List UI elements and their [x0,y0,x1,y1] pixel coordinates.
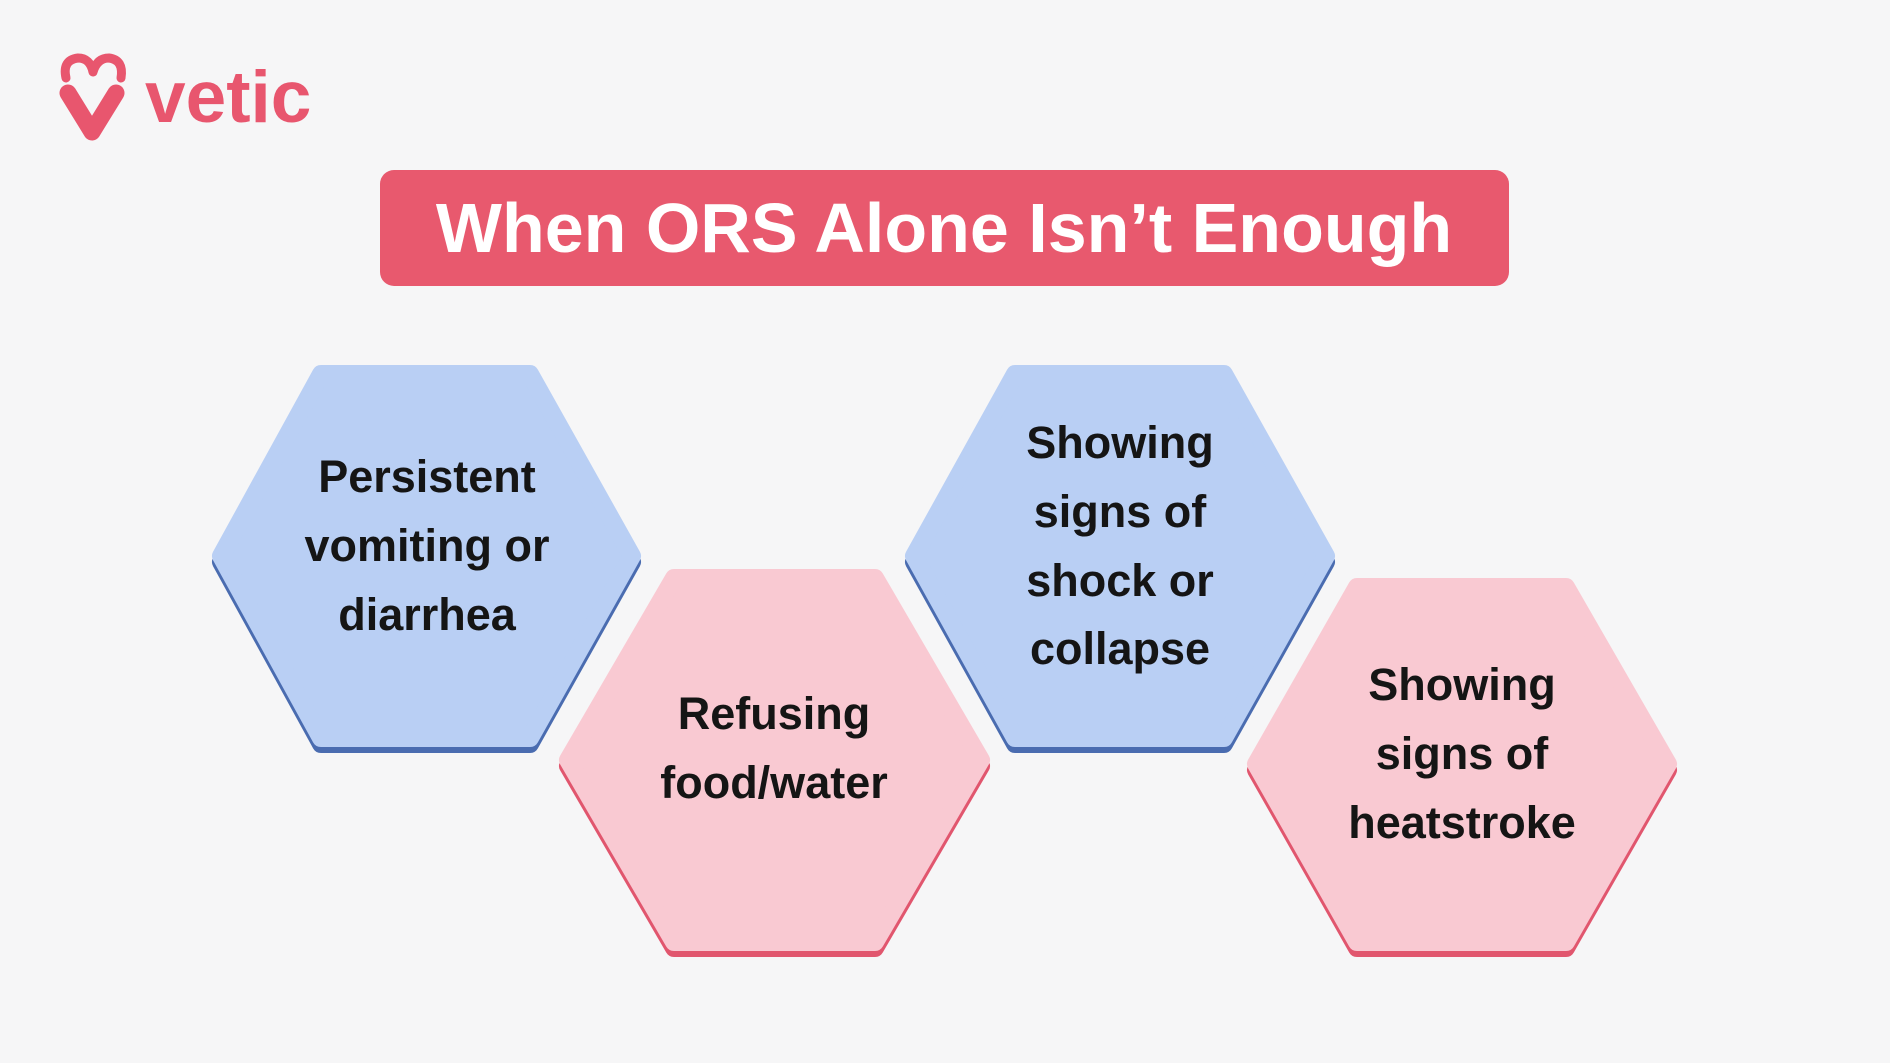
hexagon 1: persistent vomiting: Persistent [318,451,536,502]
hexagon 2: refusing food/water: Refusing [678,688,870,739]
hexagon 2: refusing food/water [568,578,981,948]
icon: heart V [65,58,122,132]
hexagon 3: shock or collapse: signs of [1034,486,1207,537]
hexagon 3: shock or collapse: shock or [1026,555,1214,606]
hexagon 4: heatstroke [1256,587,1668,948]
hexagon 4: heatstroke: heatstroke [1348,797,1576,848]
hexagon 4: heatstroke: signs of [1376,728,1549,779]
hexagon 2: refusing food/water: food/water [660,757,888,808]
hexagon 1: persistent vomiting: diarrhea [338,589,517,640]
title banner: When ORS Alone Isn’t Enough [436,189,1452,267]
hexagon 3: shock or collapse: collapse [1030,623,1210,674]
title banner [380,170,1509,286]
logo text: vetic [145,57,311,138]
hexagon 1: persistent vomiting: vomiting or [304,520,550,571]
hexagon 3: shock or collapse: Showing [1026,417,1214,468]
hexagon 3: shock or collapse [914,374,1326,744]
hexagon 1: persistent vomiting [221,374,632,744]
hexagon 4: heatstroke: Showing [1368,659,1556,710]
logo [65,57,311,138]
